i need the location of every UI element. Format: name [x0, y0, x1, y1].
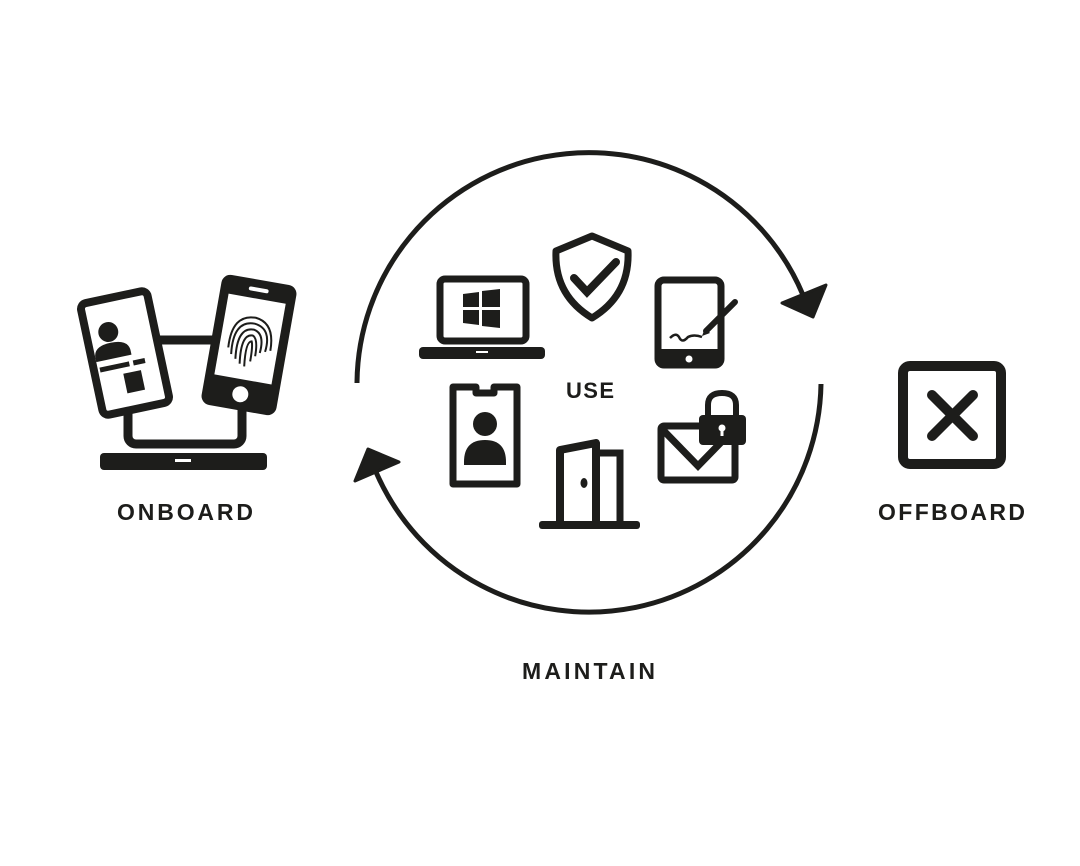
phone [200, 273, 298, 417]
label: offboard: OFFBOARD [878, 499, 1025, 525]
icon: id badge [453, 387, 517, 484]
id card [80, 290, 170, 416]
icon: onboard devices [80, 273, 298, 470]
icon: offboard x box [903, 366, 1001, 464]
label: use: USE [566, 378, 614, 403]
label: maintain: MAINTAIN [522, 658, 655, 684]
icon: tablet signature [658, 280, 735, 365]
icon: door [539, 443, 640, 529]
icon: envelope lock [661, 393, 746, 480]
icon: windows laptop [419, 279, 545, 359]
icon: shield [556, 236, 628, 318]
cycle arrows [355, 153, 826, 612]
laptop [128, 340, 242, 444]
label: onboard: ONBOARD [117, 499, 253, 525]
